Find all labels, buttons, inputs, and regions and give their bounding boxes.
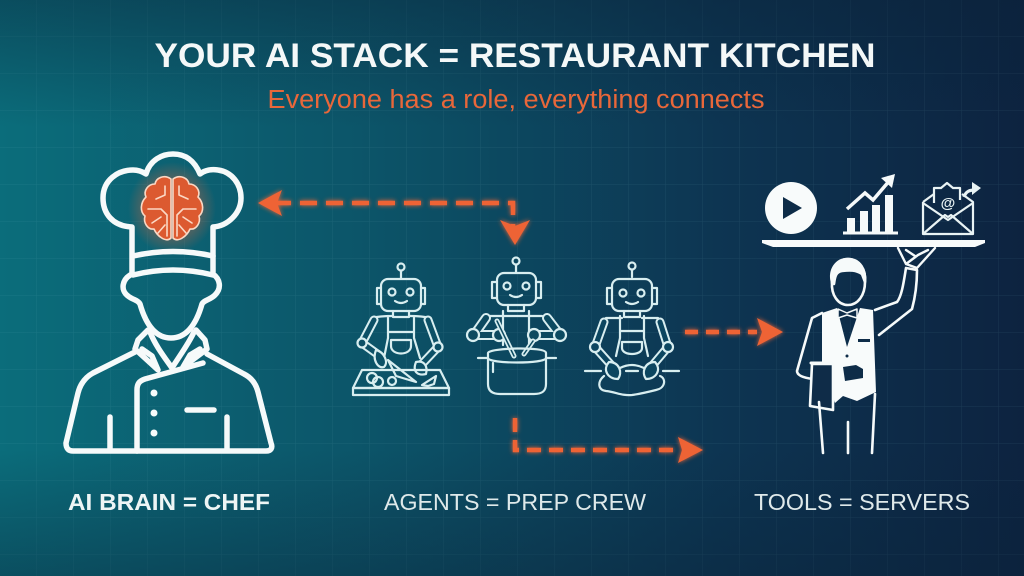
icon: email envelope bbox=[923, 182, 981, 234]
icon: waiter bbox=[797, 248, 935, 453]
icon: chef with brain bbox=[66, 154, 272, 451]
label: agents: AGENTS = PREP CREW bbox=[384, 489, 646, 515]
vest bbox=[822, 308, 876, 403]
title: YOUR AI STACK = RESTAURANT KITCHEN bbox=[154, 37, 876, 75]
collar bbox=[135, 330, 207, 370]
brain bbox=[141, 177, 203, 240]
pocket bbox=[187, 407, 214, 413]
hat band bbox=[133, 252, 213, 275]
hand bbox=[898, 248, 935, 268]
legs bbox=[819, 394, 875, 453]
arrow: chef to agents feedback loop bbox=[258, 190, 530, 245]
table and dough bbox=[585, 370, 679, 372]
arrow: prep crew down to output bbox=[515, 418, 703, 463]
icon: robot stirring pot bbox=[467, 258, 566, 394]
raised arm bbox=[875, 268, 917, 335]
arms bbox=[362, 320, 438, 364]
apron bbox=[606, 316, 658, 356]
chef head bbox=[123, 274, 219, 338]
arrowhead left bbox=[258, 190, 282, 216]
arrowhead right bbox=[678, 437, 703, 463]
arms bbox=[474, 318, 560, 335]
pot bbox=[488, 348, 546, 362]
bow tie bbox=[838, 309, 857, 318]
waiter hair bbox=[832, 259, 865, 284]
towel bbox=[810, 364, 833, 410]
buttons bbox=[150, 390, 158, 396]
jacket front bbox=[137, 363, 203, 451]
arrowhead right bbox=[757, 318, 783, 346]
arrow: prep crew to servers bbox=[685, 318, 783, 346]
label: tools: TOOLS = SERVERS bbox=[754, 489, 970, 515]
icon: email envelope: @ bbox=[941, 195, 955, 212]
left arm bbox=[797, 313, 822, 379]
apron bbox=[372, 316, 430, 358]
icon: growth chart bbox=[843, 174, 898, 233]
icon: serving tray bbox=[762, 240, 985, 247]
spoons bbox=[497, 321, 533, 356]
subtitle: Everyone has a role, everything connects bbox=[268, 86, 764, 114]
knife bbox=[388, 360, 416, 382]
arrowhead down bbox=[500, 220, 530, 245]
icon: robot chopping bbox=[353, 264, 449, 395]
arms bbox=[595, 322, 668, 366]
vest studs bbox=[843, 320, 870, 381]
cutting board bbox=[353, 370, 449, 388]
arrow: chef to prep crew bbox=[258, 330, 345, 334]
label: chef: AI BRAIN = CHEF bbox=[68, 489, 270, 515]
waiter head bbox=[831, 259, 865, 305]
icon: robot kneading dough bbox=[585, 262, 679, 395]
apron bbox=[490, 311, 542, 345]
chef hat bbox=[103, 154, 241, 272]
brain glow bbox=[128, 162, 216, 254]
icon: play button bbox=[765, 182, 817, 234]
jacket bbox=[66, 352, 272, 451]
